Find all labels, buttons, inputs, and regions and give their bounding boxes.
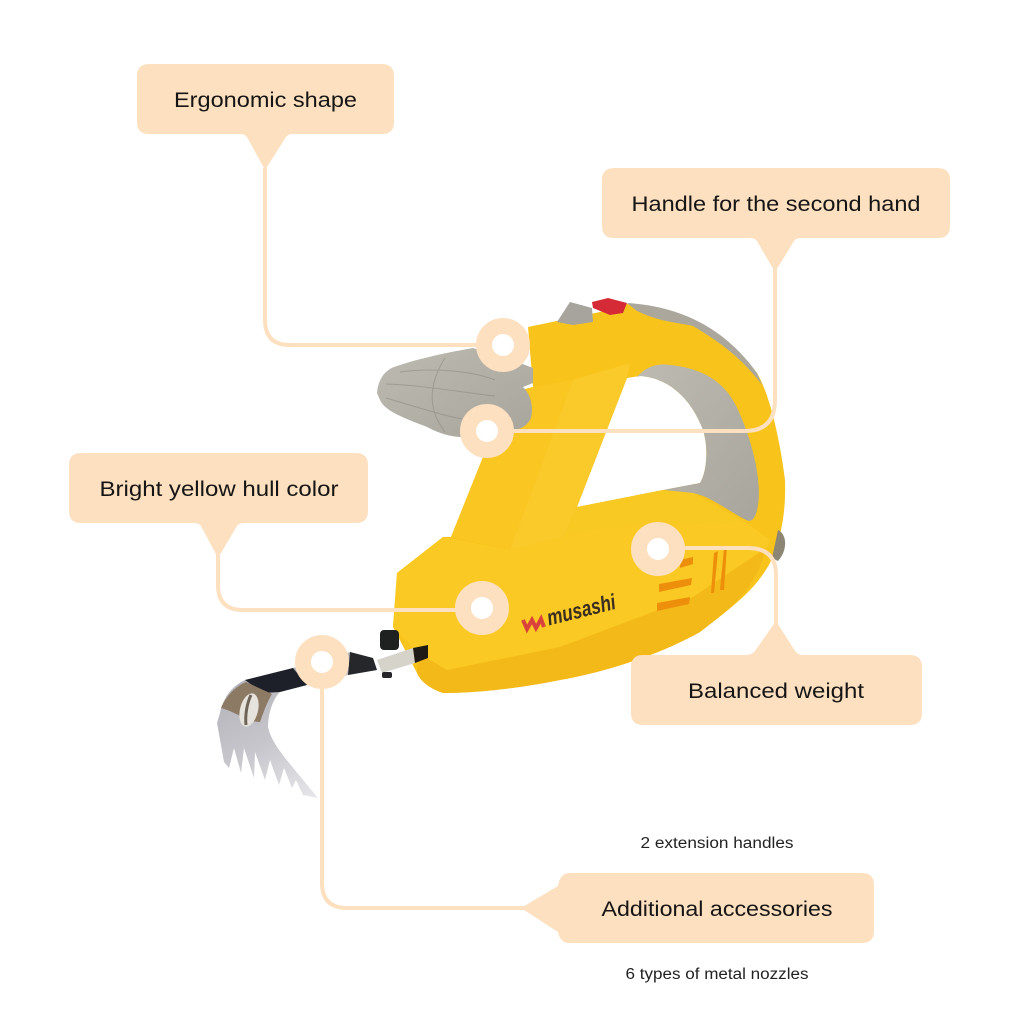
yellow body xyxy=(393,304,785,693)
label: Bright yellow hull color xyxy=(100,477,338,501)
lower body shaded underside xyxy=(417,548,766,693)
logo: musashi xyxy=(544,589,619,630)
callout: additional accessories xyxy=(322,680,874,943)
column right face xyxy=(510,363,630,550)
note: 6 types of metal nozzles: 6 types of metal nozzles xyxy=(626,966,809,983)
vents xyxy=(657,546,727,611)
callout: ergonomic shape xyxy=(137,64,480,345)
label: Handle for the second hand xyxy=(632,192,920,216)
grey inner grip xyxy=(637,365,759,521)
marker: hull color xyxy=(463,589,501,627)
note: 2 extension handles: 2 extension handles xyxy=(640,835,794,852)
logo xyxy=(523,589,619,630)
marker: ergonomic shape xyxy=(484,326,522,364)
product: garden tool xyxy=(217,298,785,798)
callout: handle for the second hand xyxy=(510,168,950,431)
nozzle: metal blade xyxy=(217,652,377,798)
marker: second hand handle xyxy=(468,412,506,450)
column left face xyxy=(451,380,573,550)
marker: accessories xyxy=(303,643,341,681)
lower body top facet xyxy=(563,490,745,537)
label: Balanced weight xyxy=(688,679,864,703)
callout: bright yellow hull color xyxy=(69,453,460,610)
callout: balanced weight xyxy=(631,548,922,725)
grey second-hand handle xyxy=(377,348,533,437)
label: Ergonomic shape xyxy=(174,88,357,112)
connector xyxy=(377,630,428,678)
grey top grip xyxy=(627,303,762,385)
label: Additional accessories xyxy=(602,897,832,921)
buttons xyxy=(557,298,627,325)
rear wheel xyxy=(772,530,785,561)
marker: balanced weight xyxy=(639,530,677,568)
lower body main face xyxy=(393,522,770,670)
